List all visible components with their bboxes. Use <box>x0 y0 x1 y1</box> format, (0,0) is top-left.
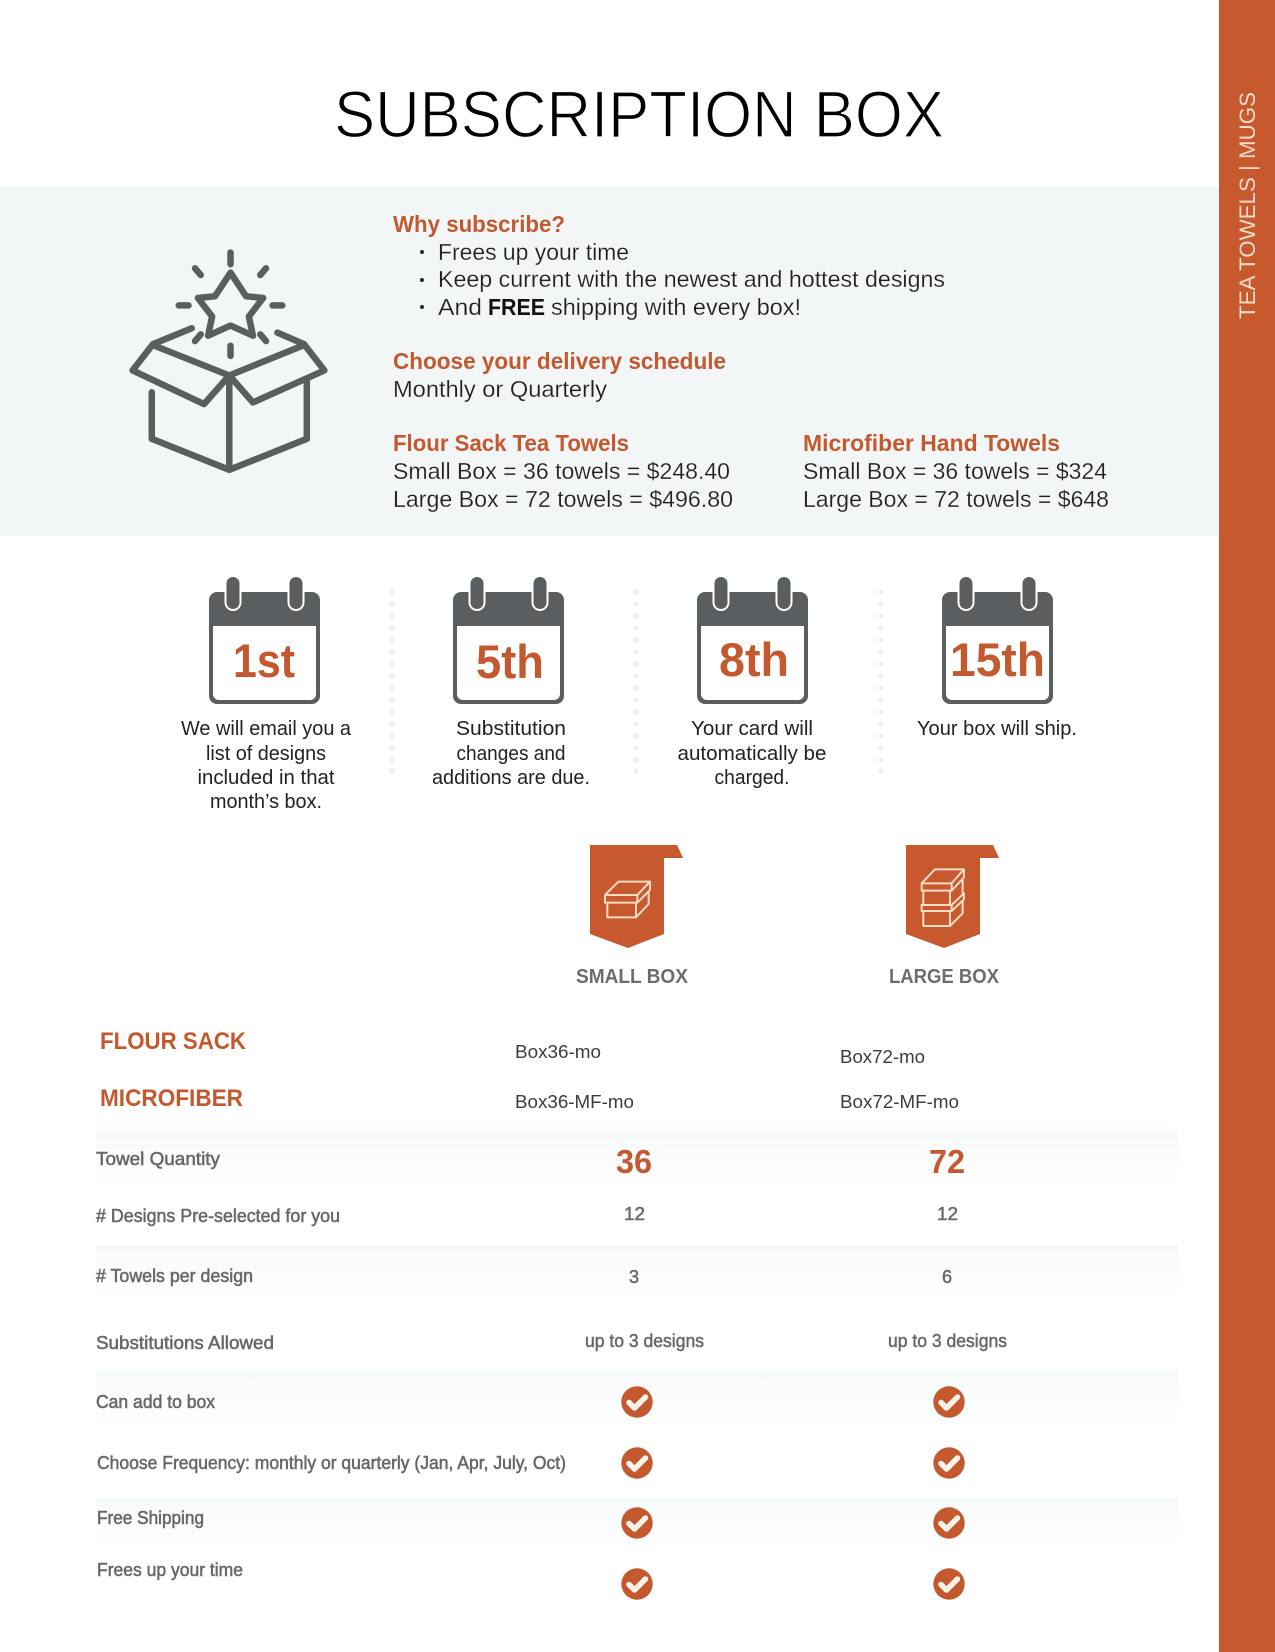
row: towel quantity <box>96 1143 965 1180</box>
heading: delivery schedule: Choose your delivery schedule <box>393 348 726 374</box>
title: SUBSCRIPTION BOX <box>334 77 944 151</box>
row: designs pre-selected: 12 <box>624 1204 645 1224</box>
codes: flour sack: Box72-mo <box>840 1047 925 1067</box>
sidebar <box>1219 0 1275 1652</box>
flour sack pricing <box>393 430 733 512</box>
label: microfiber: MICROFIBER <box>100 1085 243 1112</box>
bullet list: And <box>438 294 482 320</box>
icon: calendar 8th: 8th <box>719 633 789 686</box>
icon: open box with star <box>133 252 324 470</box>
row: substitutions: up to 3 designs <box>888 1331 1007 1351</box>
row: towels per design: # Towels per design <box>96 1265 253 1286</box>
comparison table <box>96 1132 1178 1600</box>
bullet list <box>420 239 945 320</box>
row: can add to box: Can add to box <box>96 1391 216 1412</box>
icon: calendar 1st <box>209 575 320 704</box>
icon: calendar 1st: 1st <box>233 634 295 687</box>
caption: 15th: Your box will ship. <box>917 717 1077 740</box>
microfiber pricing: Small Box = 36 towels = $324 <box>803 458 1107 484</box>
bullet list: Frees up your time <box>438 239 629 265</box>
bullet list: Keep current with the newest and hottest designs <box>438 266 945 292</box>
row: free shipping <box>97 1507 965 1539</box>
panel: why subscribe <box>0 187 1219 536</box>
codes: microfiber <box>515 1092 959 1112</box>
row: towels per design <box>96 1265 952 1287</box>
row: choose frequency: Choose Frequency: monthly or quarterly (Jan, Apr, July, Oct) <box>97 1452 566 1473</box>
row: can add to box <box>96 1386 965 1418</box>
row: towel quantity: Towel Quantity <box>96 1148 221 1169</box>
caption: 1st: list of designs <box>206 742 326 765</box>
caption: 5th: changes and <box>456 742 566 765</box>
label: small box: SMALL BOX <box>576 965 688 988</box>
row: designs pre-selected <box>96 1204 958 1226</box>
row: towels per design: 3 <box>629 1267 639 1287</box>
row: substitutions: up to 3 designs <box>585 1331 704 1351</box>
row: substitutions: Substitutions Allowed <box>96 1332 274 1353</box>
product codes <box>100 1028 959 1112</box>
icon: calendar 5th: 5th <box>476 635 544 688</box>
step: 8th <box>678 575 826 789</box>
caption: 8th: Your card will <box>691 717 813 740</box>
row: designs pre-selected: # Designs Pre-selected for you <box>96 1205 340 1226</box>
microfiber pricing: Large Box = 72 towels = $648 <box>803 486 1109 512</box>
flour sack pricing: Flour Sack Tea Towels <box>393 430 629 456</box>
codes: flour sack <box>515 1042 925 1067</box>
row: towel quantity: 36 <box>616 1143 652 1180</box>
flour sack pricing: Large Box = 72 towels = $496.80 <box>393 486 733 512</box>
row: frees up your time: Frees up your time <box>97 1559 243 1580</box>
caption: 1st: We will email you a <box>181 717 352 740</box>
caption: 5th: additions are due. <box>432 766 590 789</box>
bullet list: shipping with every box! <box>551 294 801 320</box>
row: free shipping: Free Shipping <box>97 1507 204 1528</box>
step: 5th <box>432 575 590 789</box>
row: towel quantity: 72 <box>929 1143 965 1180</box>
label: large box: LARGE BOX <box>889 965 999 988</box>
codes: microfiber: Box72-MF-mo <box>840 1092 959 1112</box>
codes: flour sack: Box36-mo <box>515 1042 601 1062</box>
caption: 1st: month’s box. <box>210 790 322 813</box>
caption: 1st: included in that <box>198 766 335 789</box>
label: flour sack: FLOUR SACK <box>100 1028 247 1055</box>
row: choose frequency <box>97 1447 965 1479</box>
sidebar label: TEA TOWELS | MUGS <box>1235 92 1260 319</box>
step: 1st <box>181 575 352 813</box>
flour sack pricing: Small Box = 36 towels = $248.40 <box>393 458 730 484</box>
column header: large box <box>889 845 999 988</box>
microfiber pricing: Microfiber Hand Towels <box>803 430 1060 456</box>
codes: microfiber: Box36-MF-mo <box>515 1092 634 1112</box>
row: frees up your time <box>97 1559 965 1600</box>
caption: 5th <box>432 717 590 789</box>
microfiber pricing <box>803 430 1109 512</box>
bullet list: FREE <box>488 294 545 320</box>
row: towels per design: 6 <box>942 1267 952 1287</box>
icon: calendar 15th <box>942 575 1053 704</box>
icon: calendar 5th <box>453 575 564 704</box>
caption: 1st <box>181 717 352 813</box>
row: substitutions <box>96 1331 1007 1353</box>
icon: small box ribbon <box>590 845 683 948</box>
column header: small box <box>576 845 688 988</box>
caption: 8th: automatically be <box>678 742 826 765</box>
delivery text: Monthly or Quarterly <box>393 376 608 402</box>
caption: 5th: Substitution <box>456 717 566 740</box>
caption: 8th <box>678 717 826 789</box>
row: designs pre-selected: 12 <box>937 1204 958 1224</box>
icon: calendar 15th: 15th <box>950 633 1045 686</box>
icon: large box ribbon <box>906 845 999 948</box>
heading: why subscribe: Why subscribe? <box>393 211 565 237</box>
caption: 8th: charged. <box>714 766 790 789</box>
step: 15th <box>917 575 1077 740</box>
icon: calendar 8th <box>697 575 808 704</box>
